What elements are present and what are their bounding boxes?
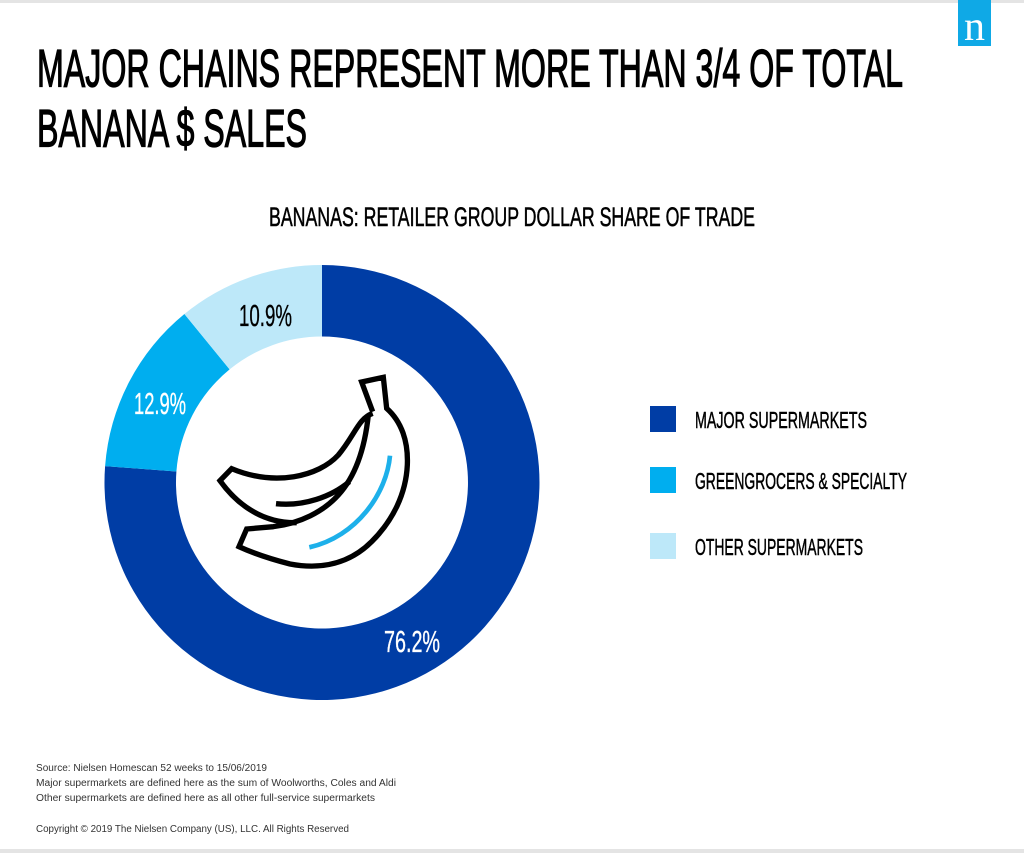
footnotes <box>36 763 396 804</box>
legend <box>650 406 907 560</box>
chart heading: BANANAS: RETAILER GROUP DOLLAR SHARE OF TRADE <box>269 202 755 232</box>
footnotes: Other supermarkets are defined here as all other full-service supermarkets <box>36 793 375 804</box>
footnotes: Major supermarkets are defined here as the sum of Woolworths, Coles and Aldi <box>36 778 396 789</box>
legend item: other supermarkets <box>650 533 863 560</box>
icon: bananas <box>220 377 407 566</box>
segment: greengrocers and specialty 12.9% <box>105 314 230 472</box>
title <box>37 40 903 158</box>
legend item: major supermarkets <box>650 406 867 433</box>
icon: Nielsen logo: n <box>964 4 985 50</box>
legend item: greengrocers and specialty <box>650 467 907 494</box>
legend item: other supermarkets: OTHER SUPERMARKETS <box>695 534 863 560</box>
legend item: major supermarkets: MAJOR SUPERMARKETS <box>695 407 867 433</box>
label: 12.9%: 12.9% <box>134 386 186 421</box>
footnotes: Source: Nielsen Homescan 52 weeks to 15/06/2019 <box>36 763 267 774</box>
title: BANANA $ SALES <box>37 100 307 158</box>
copyright: Copyright © 2019 The Nielsen Company (US), LLC. All Rights Reserved <box>36 824 349 835</box>
segment: other supermarkets 10.9% <box>184 265 322 369</box>
label: 10.9%: 10.9% <box>239 298 292 333</box>
icon: Nielsen logo <box>958 0 991 50</box>
label: 76.2%: 76.2% <box>384 624 440 659</box>
donut chart <box>104 265 539 700</box>
segment: major supermarkets 76.2% <box>104 265 539 700</box>
